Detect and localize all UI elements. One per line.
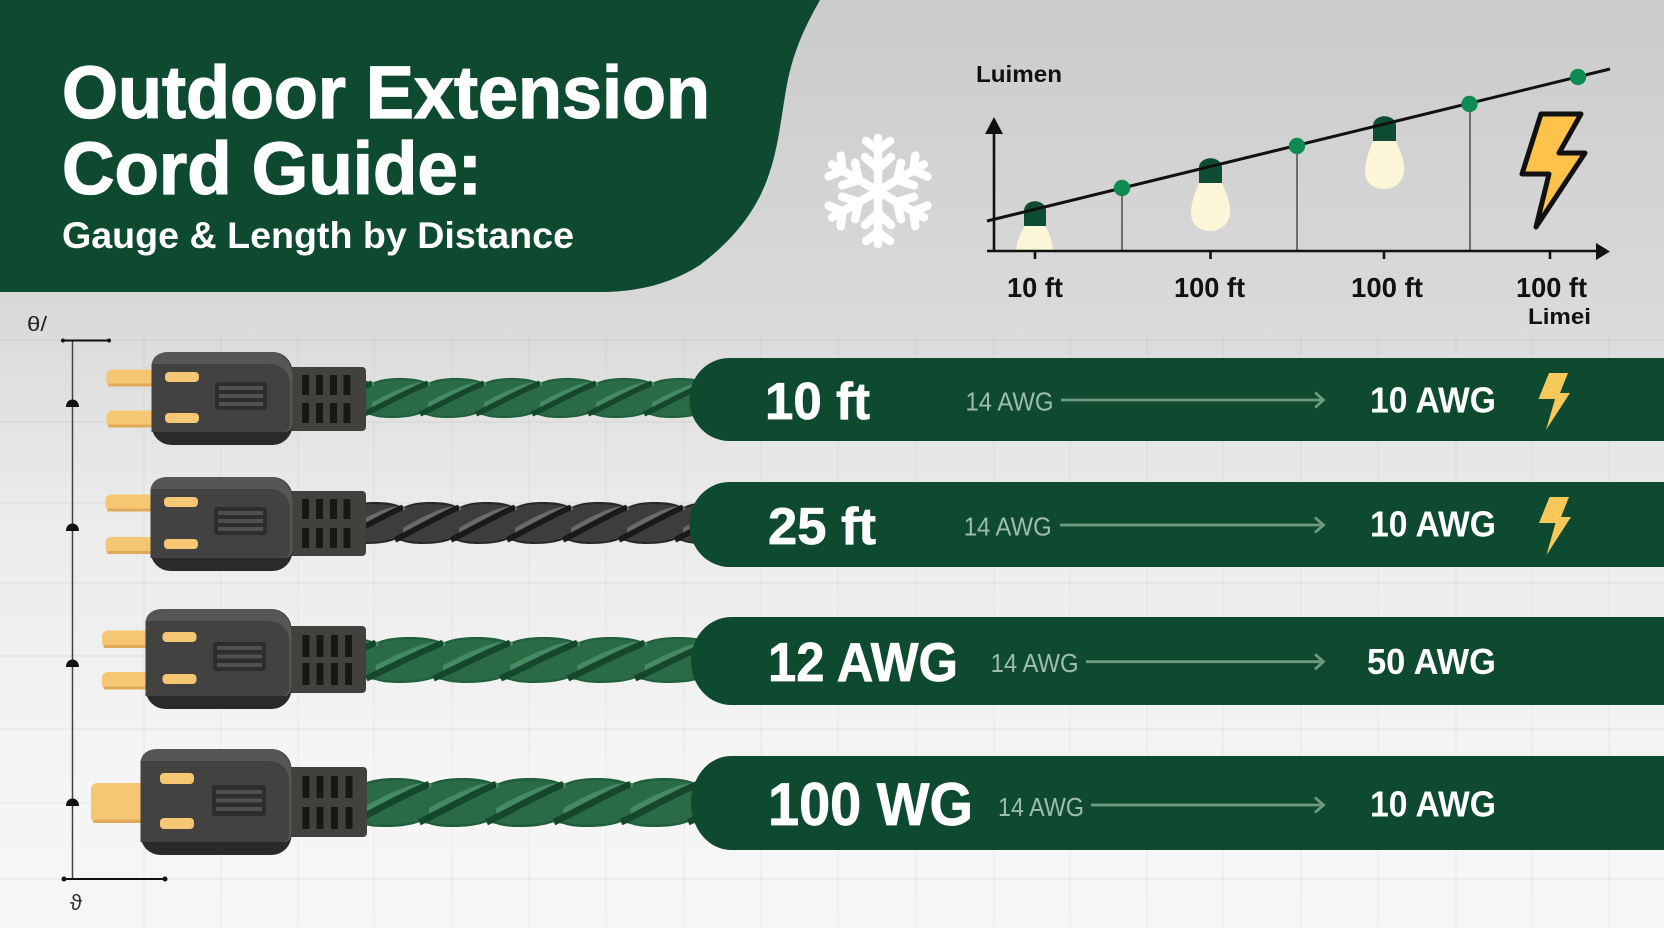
from gauge: 14 AWG <box>966 387 1054 417</box>
icon: lightning <box>1538 373 1570 430</box>
to gauge: 50 AWG <box>1367 641 1496 682</box>
x axis labels: 100 ft <box>1351 272 1423 303</box>
arrow <box>1086 654 1324 669</box>
drop lines <box>1122 104 1470 251</box>
title <box>62 51 710 210</box>
to gauge: 10 AWG <box>1370 784 1496 825</box>
header banner <box>0 0 820 292</box>
from gauge: 14 AWG <box>998 792 1084 822</box>
row 3: cord <box>102 609 702 709</box>
row 1: pill <box>690 358 1664 441</box>
icon: large lightning bolt <box>1522 114 1585 227</box>
row 2: pill <box>690 482 1664 567</box>
twisted green cord <box>362 637 702 683</box>
to gauge: 10 AWG <box>1370 504 1496 545</box>
distance label: 25 ft <box>768 498 876 556</box>
bulb 1 <box>1016 201 1053 251</box>
arrow <box>1060 518 1324 532</box>
x axis labels: 10 ft <box>1007 272 1063 303</box>
arrow <box>1091 798 1324 812</box>
row 1: cord <box>106 352 702 445</box>
row 3: pill <box>691 617 1664 705</box>
icon: lightning <box>1539 497 1571 555</box>
distance label: 10 ft <box>765 373 870 431</box>
from gauge: 14 AWG <box>991 648 1079 678</box>
chart axis title: Luimen <box>976 61 1062 87</box>
axis label bottom: ϑ <box>70 890 82 915</box>
x axis labels: 100 ft <box>1174 272 1245 303</box>
plug 1 <box>106 352 366 445</box>
to gauge: 10 AWG <box>1370 380 1496 421</box>
trend line <box>987 69 1610 221</box>
from gauge: 14 AWG <box>964 512 1052 542</box>
plug 2 <box>106 477 366 571</box>
plug 3 <box>102 609 366 709</box>
x axis labels <box>1007 272 1587 303</box>
plug 4 <box>91 749 367 855</box>
left dimension axis <box>27 314 168 915</box>
gauge label: 100 WG <box>768 771 973 838</box>
icon: snowflake <box>826 138 930 244</box>
x axis labels: 100 ft <box>1516 272 1587 303</box>
title: Cord Guide: <box>62 127 482 210</box>
bulb 2 <box>1191 158 1230 231</box>
title: Outdoor Extension <box>62 51 710 134</box>
lumen chart <box>976 61 1610 329</box>
row 2: cord <box>106 477 702 571</box>
twisted green cord <box>362 778 702 827</box>
gauge label: 12 AWG <box>768 631 958 693</box>
row 4: pill <box>691 756 1664 850</box>
x axis unit: Limei <box>1528 304 1591 329</box>
axis label top: θ/ <box>27 314 48 336</box>
arrow <box>1061 392 1324 408</box>
axes <box>985 117 1610 260</box>
row 4: cord <box>91 749 702 855</box>
twisted black cord <box>362 502 702 544</box>
twisted green cord <box>362 378 702 418</box>
bulb 3 <box>1365 116 1404 189</box>
data points <box>1114 69 1586 196</box>
subtitle: Gauge & Length by Distance <box>62 215 574 256</box>
